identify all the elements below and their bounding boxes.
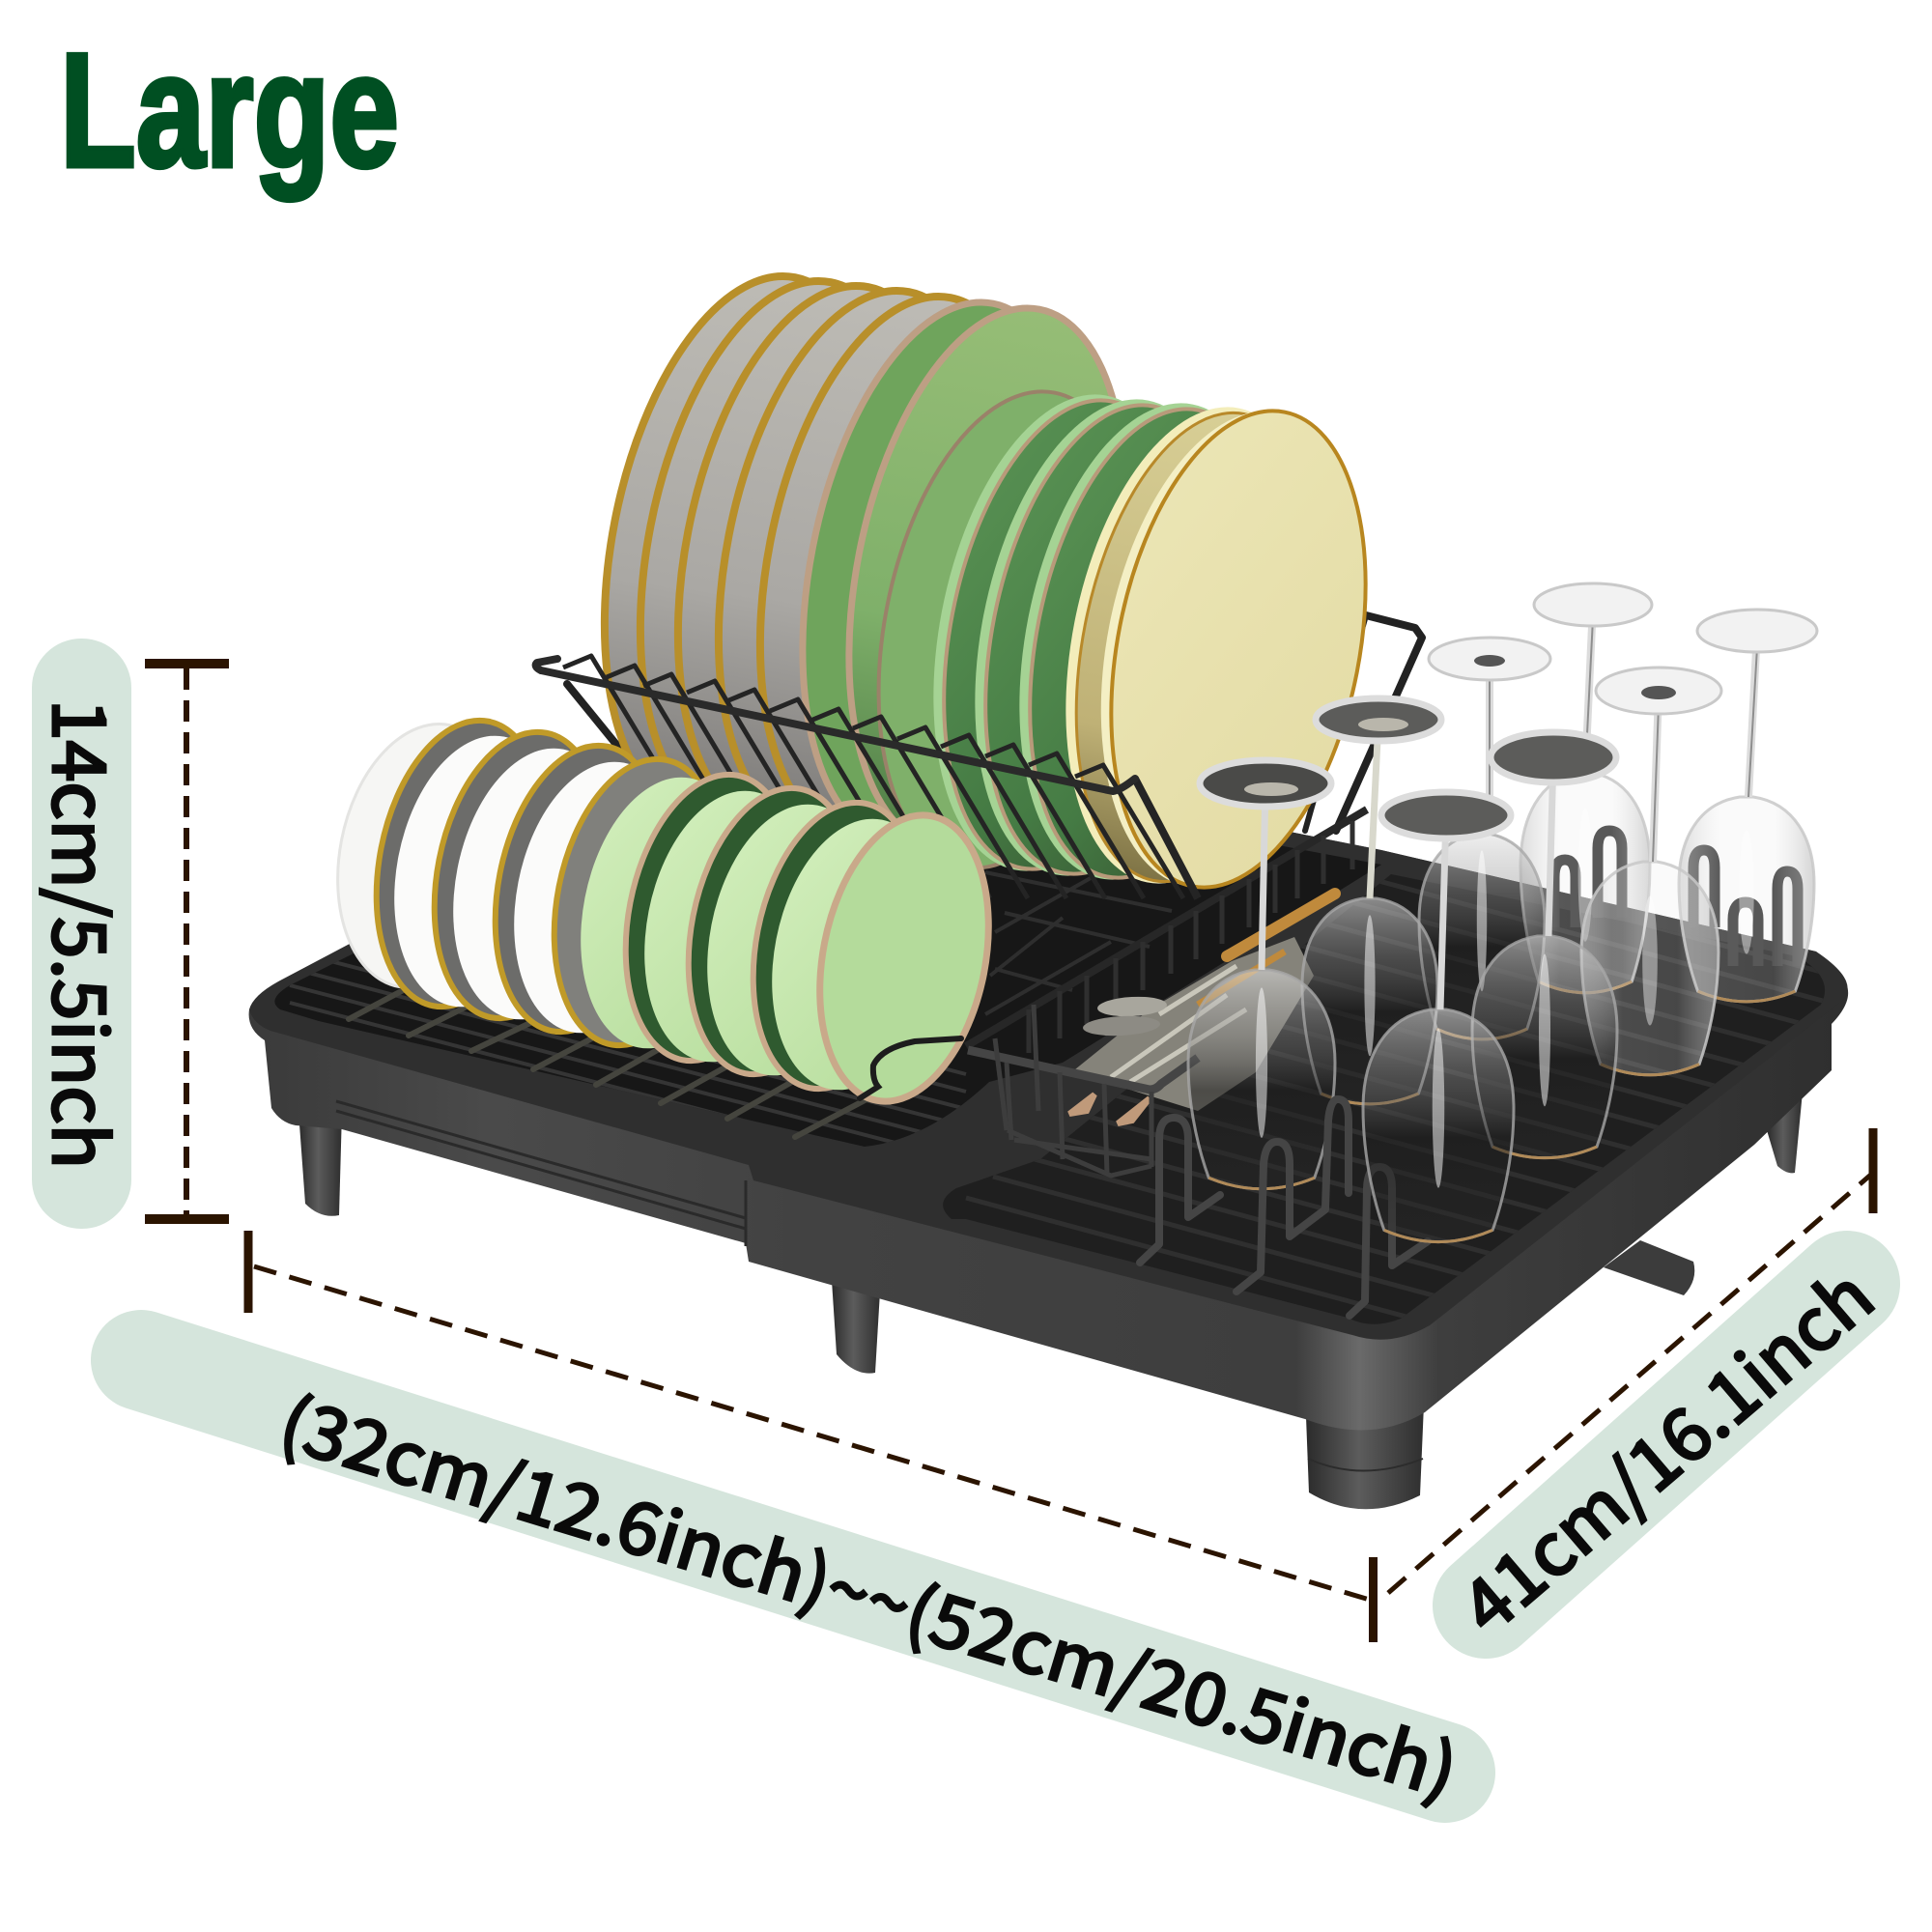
- green bowls: [558, 760, 1011, 1116]
- large green plates: [760, 278, 1176, 891]
- rack back handle and legs: [567, 615, 1422, 831]
- tray top surface: [249, 773, 1848, 1340]
- dish rack product: [249, 252, 1932, 1509]
- gray plates with gold rims: [562, 252, 1079, 860]
- width dimension label: (32cm/12.6inch)~~(52cm/20.5inch): [270, 1366, 1471, 1819]
- height dimension label: 14cm/5.5inch: [32, 699, 138, 1169]
- tray feet and spout: [298, 1092, 1803, 1509]
- left drying grate: [274, 846, 1381, 1147]
- cutlery basket front: [968, 1005, 1198, 1176]
- wine glasses front row: [1188, 698, 1617, 1189]
- stacked bowls: [316, 706, 1011, 1116]
- height bracket: [145, 664, 229, 1219]
- nearest wine glass: [1363, 792, 1514, 1242]
- wine glasses back row: [1419, 583, 1817, 1075]
- hook wire: [860, 1038, 961, 1098]
- depth dimension label: 41cm/16.1inch: [1435, 1242, 1892, 1654]
- pins seen through the back glasses: [1554, 831, 1798, 966]
- cutlery: [1069, 894, 1335, 1123]
- cutlery basket back wall: [966, 810, 1367, 1053]
- front glass pins: [1140, 1099, 1428, 1316]
- width and depth brackets: [248, 1128, 1873, 1642]
- yellow plates: [1029, 385, 1403, 910]
- rack front rail and teeth: [536, 656, 1198, 898]
- right ribbed well: [943, 874, 1825, 1324]
- tray body: [249, 773, 1848, 1430]
- white bowls: [316, 706, 746, 1060]
- dark green plates: [896, 373, 1312, 901]
- title: Large: [60, 19, 399, 201]
